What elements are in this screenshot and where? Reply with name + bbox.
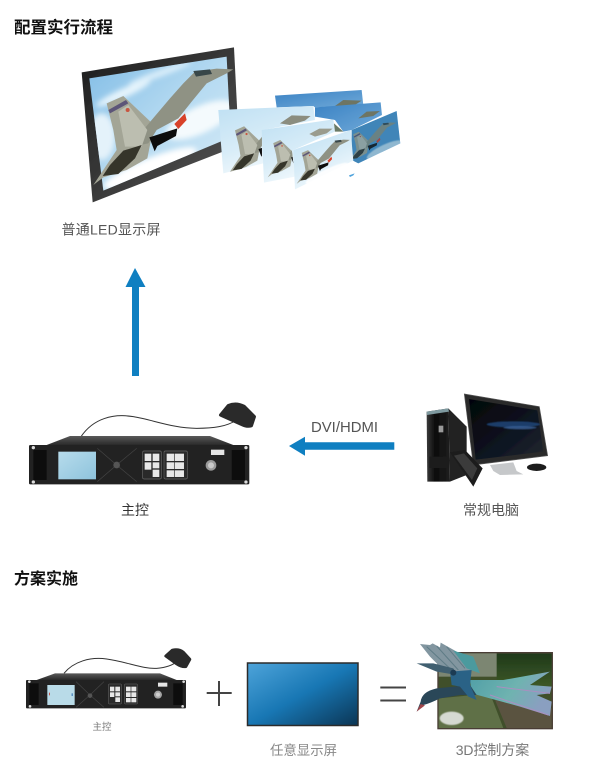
label: 普通LED显示屏: 普通LED显示屏 bbox=[62, 222, 160, 238]
button block left bbox=[143, 451, 161, 479]
keyboard bbox=[450, 450, 483, 487]
layered frame: left bbox=[218, 106, 315, 173]
monitor stand bbox=[490, 462, 523, 475]
monitor screen bbox=[469, 399, 543, 460]
icon: plus bbox=[207, 681, 232, 706]
label: 主控 small: 主控 bbox=[92, 721, 112, 733]
label: 主控: 主控 bbox=[121, 502, 149, 518]
heading: 方案实施: 方案实施 bbox=[14, 569, 78, 588]
button block right bbox=[164, 451, 187, 479]
layered frame: middle bbox=[262, 119, 335, 183]
LED display frame bbox=[82, 47, 239, 202]
badge bbox=[211, 450, 224, 455]
chassis lid bbox=[37, 673, 177, 680]
panel: blue display bbox=[248, 663, 358, 726]
monitor bbox=[464, 394, 548, 465]
LCD bbox=[47, 685, 75, 705]
creature: body bbox=[417, 685, 477, 712]
layered frame: front bbox=[293, 130, 353, 189]
centre emblem bbox=[97, 448, 137, 482]
knob bbox=[206, 460, 216, 471]
label: 任意显示屏: 任意显示屏 bbox=[270, 742, 337, 758]
button block right bbox=[124, 684, 138, 704]
label: DVI/HDMI: DVI/HDMI bbox=[311, 420, 378, 436]
display background bbox=[438, 653, 552, 729]
layered frame: third bbox=[352, 111, 400, 163]
title: 配置实行流程: 配置实行流程 bbox=[14, 17, 113, 37]
button block left bbox=[108, 684, 122, 704]
knob bbox=[154, 691, 162, 699]
cliff scene bbox=[439, 693, 503, 728]
label: 常规电脑: 常规电脑 bbox=[463, 502, 519, 518]
arrow: upward blue arrow bbox=[126, 268, 146, 376]
cable bbox=[64, 658, 178, 673]
creature: rider bbox=[450, 670, 477, 700]
device: main controller small bbox=[26, 650, 190, 708]
centre emblem bbox=[76, 682, 104, 707]
icon: equals bbox=[380, 686, 406, 702]
antenna puck bbox=[166, 650, 190, 667]
cable bbox=[81, 416, 237, 437]
LCD bbox=[58, 452, 96, 479]
chassis front panel bbox=[26, 680, 186, 708]
device: desktop computer bbox=[427, 394, 548, 487]
image: 3D display with flying creature bbox=[417, 643, 552, 729]
tower front bbox=[427, 408, 450, 482]
label: 3D控制方案: 3D控制方案 bbox=[456, 742, 529, 758]
LED display sky screen bbox=[89, 57, 231, 191]
chassis lid bbox=[47, 436, 233, 445]
creature: rear wing bbox=[420, 643, 473, 675]
image: LED display with fighter jet and layered frames bbox=[82, 47, 405, 202]
badge bbox=[158, 683, 167, 687]
device: main controller bbox=[29, 404, 254, 484]
layered frame: second bbox=[315, 102, 382, 132]
creature: right wing bbox=[470, 672, 552, 716]
fighter jet bbox=[93, 69, 233, 185]
arrow: left blue arrow bbox=[289, 437, 394, 456]
layered frame: back bbox=[275, 90, 363, 107]
tower side bbox=[448, 408, 467, 482]
chassis front panel bbox=[29, 445, 249, 484]
antenna puck bbox=[221, 404, 254, 426]
mouse bbox=[527, 464, 546, 471]
screen light streak bbox=[487, 421, 540, 427]
